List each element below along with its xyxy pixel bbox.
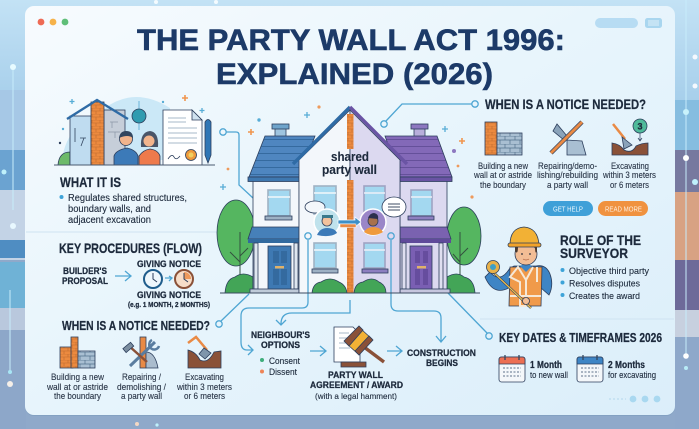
- arrow to construction: [387, 346, 402, 356]
- section: when is a notice needed (upper right): the boundary: [480, 180, 526, 190]
- section: when is a notice needed (lower): a party wall: [121, 391, 162, 401]
- date two: 2 Months: [608, 360, 645, 371]
- icon: brick wall: [485, 122, 522, 155]
- title: EXPLAINED (2026): [216, 58, 493, 91]
- builder's proposal: [62, 266, 108, 287]
- icon: clock two: [175, 270, 193, 288]
- left wing: [248, 124, 315, 293]
- section: when is a notice needed (upper right): or 6 meters: [610, 180, 649, 190]
- central illustration: semi-detached houses: [217, 107, 481, 293]
- section: when is a notice needed (lower): Building a new: [51, 372, 104, 382]
- label: construction begins: [407, 348, 476, 369]
- text block: role of the surveyor: Creates the award: [569, 291, 640, 302]
- date one: 1 Month: [530, 360, 562, 371]
- section: when is a notice needed (upper right): [473, 97, 656, 190]
- text block: what it is: boundary walls, and: [68, 204, 151, 215]
- date one: [530, 360, 568, 380]
- heading: WHEN IS A NOTICE NEEDED?: [62, 318, 210, 333]
- section: when is a notice needed (upper right): lishing/rebuilding: [537, 170, 598, 180]
- icon: excavation: [188, 337, 221, 368]
- label: party wall agreement: (with a legal hamment): [315, 391, 397, 401]
- small arrow: [165, 276, 172, 281]
- text block: role of the surveyor: [560, 232, 649, 302]
- section: when is a notice needed (lower): within 3 meters: [176, 382, 232, 392]
- giving notice note: [128, 290, 210, 309]
- block: neighbour's options: NEIGHBOUR'S: [251, 330, 310, 341]
- section: when is a notice needed (upper right): Building a new: [478, 161, 528, 171]
- icon: clock one: [144, 270, 162, 288]
- section: when is a notice needed (lower): demolishing /: [117, 382, 166, 392]
- icon: calendar two months: [577, 355, 603, 382]
- icon: document and gavel: [334, 326, 384, 367]
- section: key procedures flow: [59, 240, 210, 309]
- giving notice note: GIVING NOTICE: [137, 290, 201, 301]
- text block: what it is: adjacent excavation: [68, 215, 151, 226]
- heading: KEY PROCEDURES (FLOW): [59, 240, 202, 256]
- pagination dots: [609, 396, 660, 402]
- label: shared party wall: party wall: [322, 162, 377, 177]
- tree right: [447, 207, 481, 293]
- button: read more: READ MORE: [605, 204, 642, 214]
- icon: neighbours: [114, 131, 160, 165]
- icon: tools: [123, 337, 159, 368]
- button: get help: [543, 201, 593, 216]
- label: construction begins: BEGINS: [426, 358, 458, 369]
- porch and door left: [248, 227, 299, 293]
- hard hat: [510, 227, 539, 245]
- central gable: [293, 107, 407, 293]
- text block: role of the surveyor: ROLE OF THE: [560, 232, 641, 248]
- text block: role of the surveyor: Resolves disputes: [569, 278, 640, 290]
- connector lines: [216, 101, 492, 355]
- label: construction begins: CONSTRUCTION: [407, 348, 476, 359]
- icon: signed document: [163, 110, 202, 165]
- section: when is a notice needed (lower): [46, 318, 232, 401]
- heading: WHEN IS A NOTICE NEEDED?: [485, 97, 646, 112]
- text block: what it is: [60, 175, 187, 226]
- label: shared party wall: [322, 149, 377, 177]
- section: when is a notice needed (upper right): within 3 meters: [602, 170, 656, 180]
- text block: role of the surveyor: SURVEYOR: [560, 245, 628, 261]
- party wall brick strip: [347, 114, 354, 293]
- builder's proposal: BUILDER'S: [63, 266, 107, 277]
- text block: what it is: Regulates shared structures,: [68, 193, 187, 204]
- giving notice note: (e.g. 1 MONTH, 2 MONTHS): [128, 302, 210, 309]
- icon: broken wall: [551, 122, 586, 155]
- label: party wall agreement: PARTY WALL: [328, 370, 383, 381]
- date two: [608, 360, 656, 380]
- label: shared party wall: shared: [331, 149, 369, 164]
- section: when is a notice needed (lower): Repairing /: [122, 372, 161, 382]
- right wing: [385, 124, 452, 293]
- icon: surveyor figure: [485, 227, 552, 308]
- text block: role of the surveyor: Objective third party: [569, 266, 649, 277]
- illustration: what it is: [54, 97, 215, 165]
- window control dots: [38, 19, 68, 25]
- section: when is a notice needed (upper right): a party wall: [547, 180, 588, 190]
- date two: for excavating: [608, 370, 656, 380]
- block: neighbour's options: OPTIONS: [261, 340, 300, 351]
- block: neighbour's options: [251, 330, 310, 377]
- section: when is a notice needed (upper right): Repairing/demo-: [538, 161, 597, 171]
- section: when is a notice needed (lower): wall at or astride: [46, 382, 108, 392]
- icon: calendar one month: [499, 355, 525, 382]
- porch and door right: [400, 227, 451, 293]
- connector rings on houses: [305, 233, 394, 293]
- label: party wall agreement: [310, 370, 403, 401]
- icon: globe balance: [132, 101, 146, 130]
- icon: shared wall building: [58, 100, 128, 165]
- label: party wall agreement: AGREEMENT / AWARD: [310, 380, 403, 391]
- giving notice heading: GIVING NOTICE: [137, 259, 201, 270]
- arrow: [115, 271, 131, 281]
- button: read more: [598, 201, 648, 216]
- title: [137, 24, 565, 91]
- sparkle decorations: [59, 95, 474, 199]
- section: when is a notice needed (lower): Excavating: [185, 372, 224, 382]
- section: when is a notice needed (upper right): Excavating: [611, 161, 649, 171]
- date one: to new wall: [530, 370, 568, 380]
- icon: excavation with number 3: 3: [638, 122, 643, 132]
- central bushes: [312, 279, 386, 293]
- neighbours talking: [305, 197, 406, 236]
- icon: pen: [205, 120, 211, 163]
- measuring tape: [491, 270, 531, 308]
- builder's proposal: PROPOSAL: [62, 276, 108, 287]
- window address pill and menu: [595, 18, 662, 28]
- text block: what it is: WHAT IT IS: [60, 175, 121, 190]
- button: get help: GET HELP: [553, 204, 583, 214]
- block: neighbour's options: Dissent: [269, 367, 297, 377]
- icon: brick wall: [60, 337, 95, 368]
- central windows: [312, 186, 388, 273]
- section: key dates and timeframes: [499, 330, 662, 382]
- icon: excavation with number 3: [612, 119, 648, 155]
- arrow to agreement: [310, 346, 326, 356]
- section: when is a notice needed (lower): or 6 meters: [184, 391, 225, 401]
- arms and torso: [485, 266, 552, 303]
- block: neighbour's options: Consent: [269, 356, 300, 366]
- tree left: [217, 200, 255, 293]
- section: when is a notice needed (upper right): wall at or astride: [473, 170, 532, 180]
- section: when is a notice needed (lower): the boundary: [54, 391, 101, 401]
- title: THE PARTY WALL ACT 1996:: [137, 24, 565, 57]
